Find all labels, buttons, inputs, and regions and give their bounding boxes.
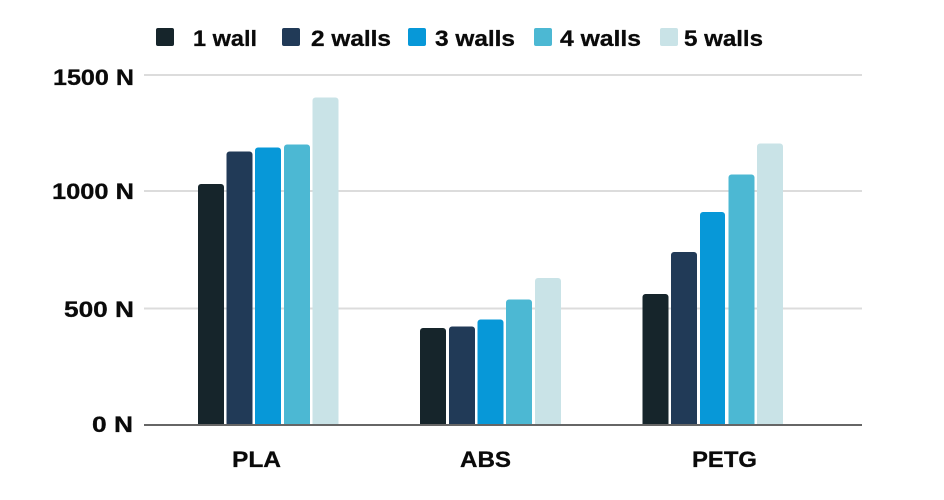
legend [156,26,763,51]
y axis labels: 1500 N [53,65,134,90]
x axis labels: ABS [460,447,511,472]
y axis labels [52,65,134,437]
y axis labels: 0 N [92,412,133,437]
legend: 5 walls [684,26,763,51]
legend: 2 walls [311,26,391,51]
x axis labels [232,447,757,472]
x axis labels: PETG [692,447,757,472]
y axis labels: 500 N [64,297,134,322]
bars: PETG [642,144,783,424]
legend: 3 walls [435,26,515,51]
bars: PLA [198,98,338,424]
bars: ABS [420,278,561,424]
gridlines and axis [144,74,862,426]
legend: 4 walls [560,26,641,51]
x axis labels: PLA [232,447,281,472]
y axis labels: 1000 N [52,179,134,204]
legend: 1 wall [193,26,257,51]
